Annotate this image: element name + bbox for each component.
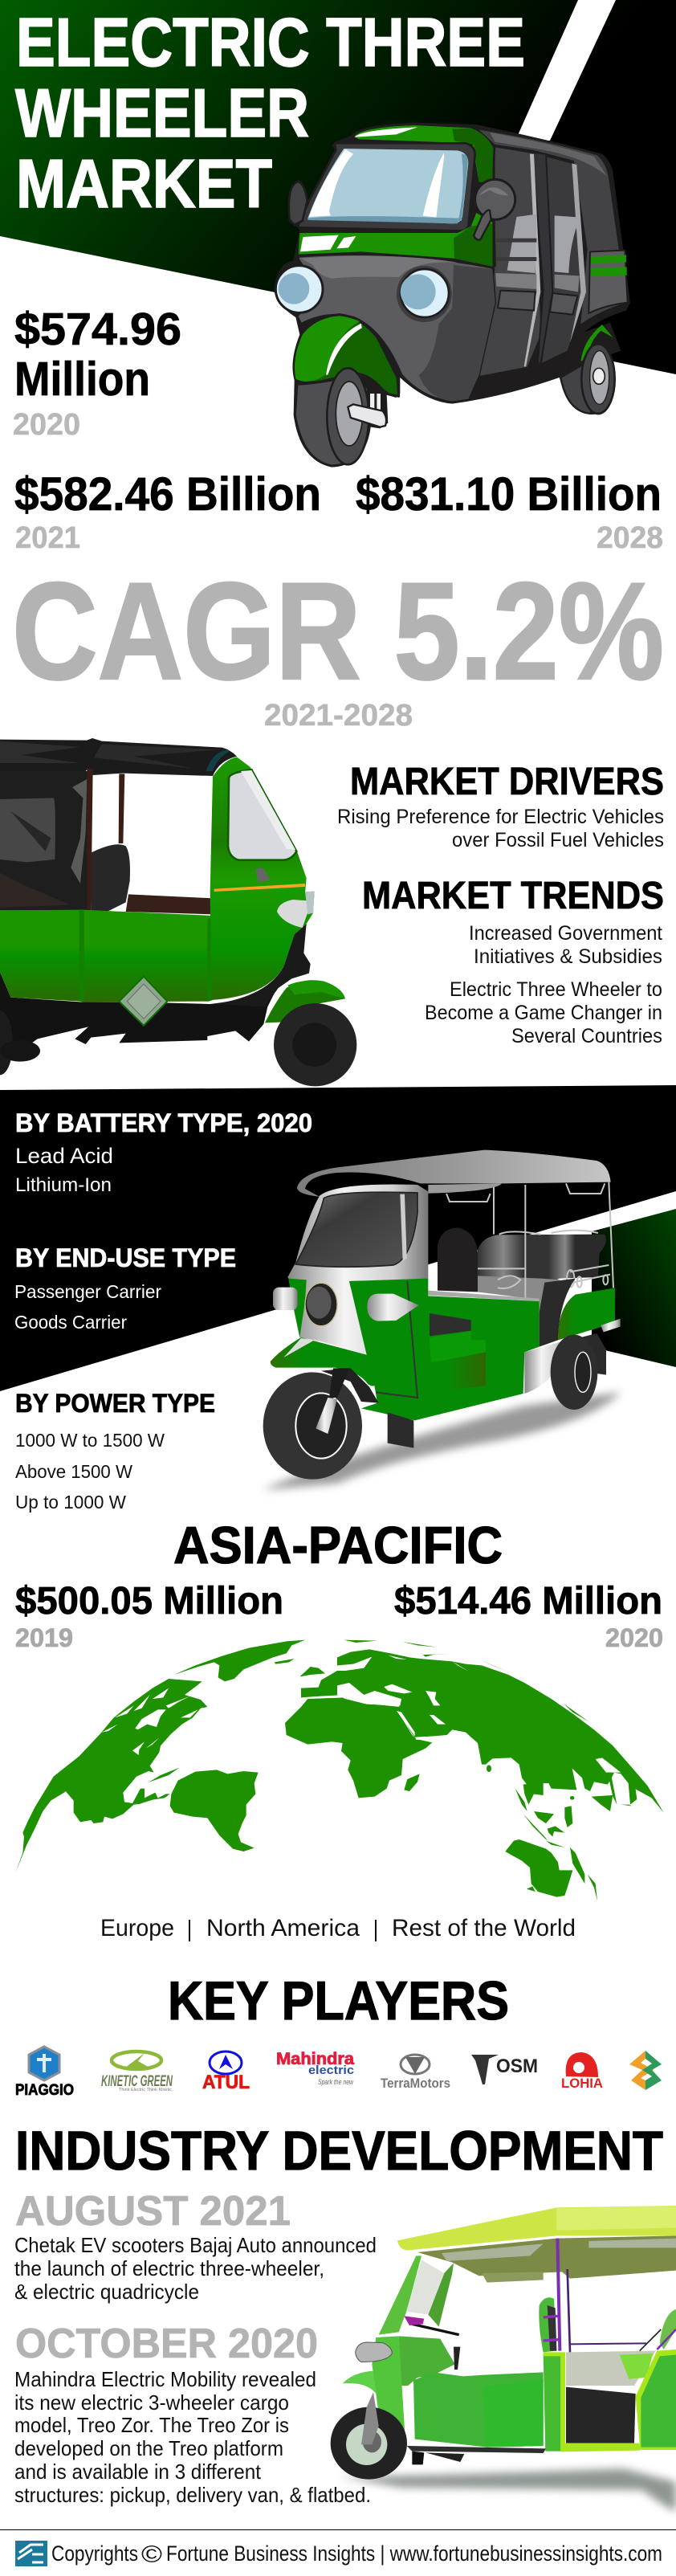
other regions: Rest of the World — [392, 1915, 576, 1941]
segment: battery type: Lithium-Ion — [15, 1174, 112, 1196]
development: October 2020: Mahindra Electric Mobility revealed — [14, 2367, 316, 2391]
panel: market trends: Become a Game Changer in — [425, 1002, 662, 1024]
segment: power type: Up to 1000 W — [15, 1492, 126, 1513]
panel: market trends: Electric Three Wheeler to — [450, 978, 662, 1001]
segment: power type: 1000 W to 1500 W — [15, 1430, 165, 1451]
segment: end-use type: Goods Carrier — [14, 1312, 127, 1333]
heading: key players: KEY PLAYERS — [168, 1970, 509, 2031]
logo: Kinetic Green: Think Electric Think Kinetic — [119, 2088, 173, 2092]
regional heading: 2020 — [605, 1623, 663, 1652]
title: ELECTRIC THREE — [16, 5, 525, 81]
regional heading: 2019 — [15, 1623, 73, 1652]
stat: 2028 market size: $831.10 Billion — [356, 468, 662, 521]
logo: Mahindra Electric — [276, 2050, 354, 2086]
panel: market trends: Several Countries — [511, 1025, 662, 1047]
logo: Atul: ATUL — [202, 2072, 250, 2093]
illustration: green and grey auto rickshaw — [275, 123, 630, 467]
development: October 2020: its new electric 3-wheeler cargo — [14, 2390, 289, 2415]
other regions: Europe — [100, 1915, 174, 1941]
segment: power type: BY POWER TYPE — [15, 1389, 215, 1418]
footer: Copyrights — [51, 2541, 138, 2566]
stat: 2028 market size: 2028 — [597, 521, 663, 555]
segment: end-use type: Passenger Carrier — [14, 1281, 161, 1302]
development: August 2021: AUGUST 2021 — [15, 2188, 291, 2235]
stat: 2020 market size: 2020 — [13, 408, 80, 442]
development: August 2021: Chetak EV scooters Bajaj Auto announced — [14, 2233, 377, 2257]
title — [15, 5, 525, 222]
segment: end-use type — [14, 1243, 236, 1333]
CAGR: 2021-2028 — [264, 699, 413, 733]
panel: market trends — [362, 875, 664, 1047]
panel: market trends: Initiatives & Subsidies — [474, 945, 662, 968]
stat: 2028 market size — [356, 468, 663, 555]
logo: Kinetic Green — [101, 2051, 173, 2092]
development: October 2020: developed on the Treo platform — [14, 2436, 283, 2460]
segment: power type: Above 1500 W — [15, 1461, 132, 1482]
logo: orange and green emblem — [629, 2051, 662, 2090]
header background — [0, 0, 676, 374]
logo: TerraMotors — [381, 2055, 450, 2091]
segment background — [0, 1085, 676, 1391]
stat: 2020 market size: Million — [14, 353, 150, 406]
development: October 2020: structures: pickup, delivery van, & flatbed. — [14, 2483, 371, 2507]
logo: Lohia: LOHIA — [561, 2076, 603, 2091]
logo: Lohia — [561, 2052, 603, 2091]
logo: Mahindra Electric: electric — [308, 2064, 354, 2077]
panel: market drivers — [337, 761, 664, 851]
logo: OSM — [471, 2055, 538, 2084]
panel: market trends: Increased Government — [469, 922, 662, 945]
regional heading: ASIA-PACIFIC — [173, 1516, 503, 1574]
development: August 2021 — [14, 2188, 377, 2304]
illustration: side view green rickshaw — [0, 738, 356, 1086]
illustration: lime green rickshaw — [331, 2206, 676, 2512]
development: August 2021: & electric quadricycle — [14, 2280, 199, 2304]
map: Eurasia, Africa and Australia — [285, 1640, 664, 1901]
regional heading — [15, 1516, 663, 1652]
development: October 2020: OCTOBER 2020 — [15, 2321, 318, 2367]
stat: 2021 market size: 2021 — [15, 521, 80, 555]
map: Americas and Greenland — [15, 1640, 325, 1873]
logo: Kinetic Green: KINETIC GREEN — [101, 2073, 173, 2090]
segment: battery type — [15, 1108, 312, 1196]
regional heading: $514.46 Million — [394, 1580, 662, 1623]
logo: Piaggio — [15, 2047, 74, 2099]
logo: OSM: OSM — [496, 2055, 538, 2077]
logo: TerraMotors: TerraMotors — [381, 2076, 450, 2091]
development: October 2020: model, Treo Zor. The Treo Zor is — [14, 2413, 289, 2437]
world map — [15, 1640, 664, 1901]
regional heading: $500.05 Million — [15, 1580, 283, 1623]
segment: battery type: Lead Acid — [15, 1144, 113, 1168]
footer: © — [141, 2541, 162, 2568]
logo: Mahindra Electric: Mahindra — [276, 2050, 354, 2068]
other regions: North America — [206, 1915, 360, 1941]
footer — [0, 2529, 676, 2568]
stat: 2020 market size: $574.96 — [14, 304, 181, 355]
segment: battery type: BY BATTERY TYPE, 2020 — [15, 1108, 312, 1137]
development: October 2020 — [14, 2321, 371, 2507]
title: MARKET — [16, 146, 272, 222]
segment: end-use type: BY END-USE TYPE — [15, 1243, 236, 1272]
logo: Mahindra Electric: Spark the new — [318, 2078, 353, 2086]
panel: market drivers: Rising Preference for Electric Vehicles — [337, 806, 664, 828]
stat: 2021 market size — [14, 468, 321, 555]
stat: 2021 market size: $582.46 Billion — [14, 468, 321, 521]
title: WHEELER — [15, 76, 309, 152]
segment: power type — [15, 1389, 215, 1513]
development: October 2020: and is available in 3 different — [14, 2460, 262, 2484]
stat: 2020 market size — [13, 304, 181, 442]
other regions — [100, 1915, 576, 1941]
illustration: front view green rickshaw with grey roof — [263, 1150, 621, 1490]
development: August 2021: the launch of electric three-wheeler, — [14, 2256, 324, 2280]
panel: market drivers: over Fossil Fuel Vehicles — [452, 829, 664, 851]
logo: Piaggio: PIAGGIO — [15, 2082, 74, 2099]
logo: Atul — [202, 2051, 250, 2093]
